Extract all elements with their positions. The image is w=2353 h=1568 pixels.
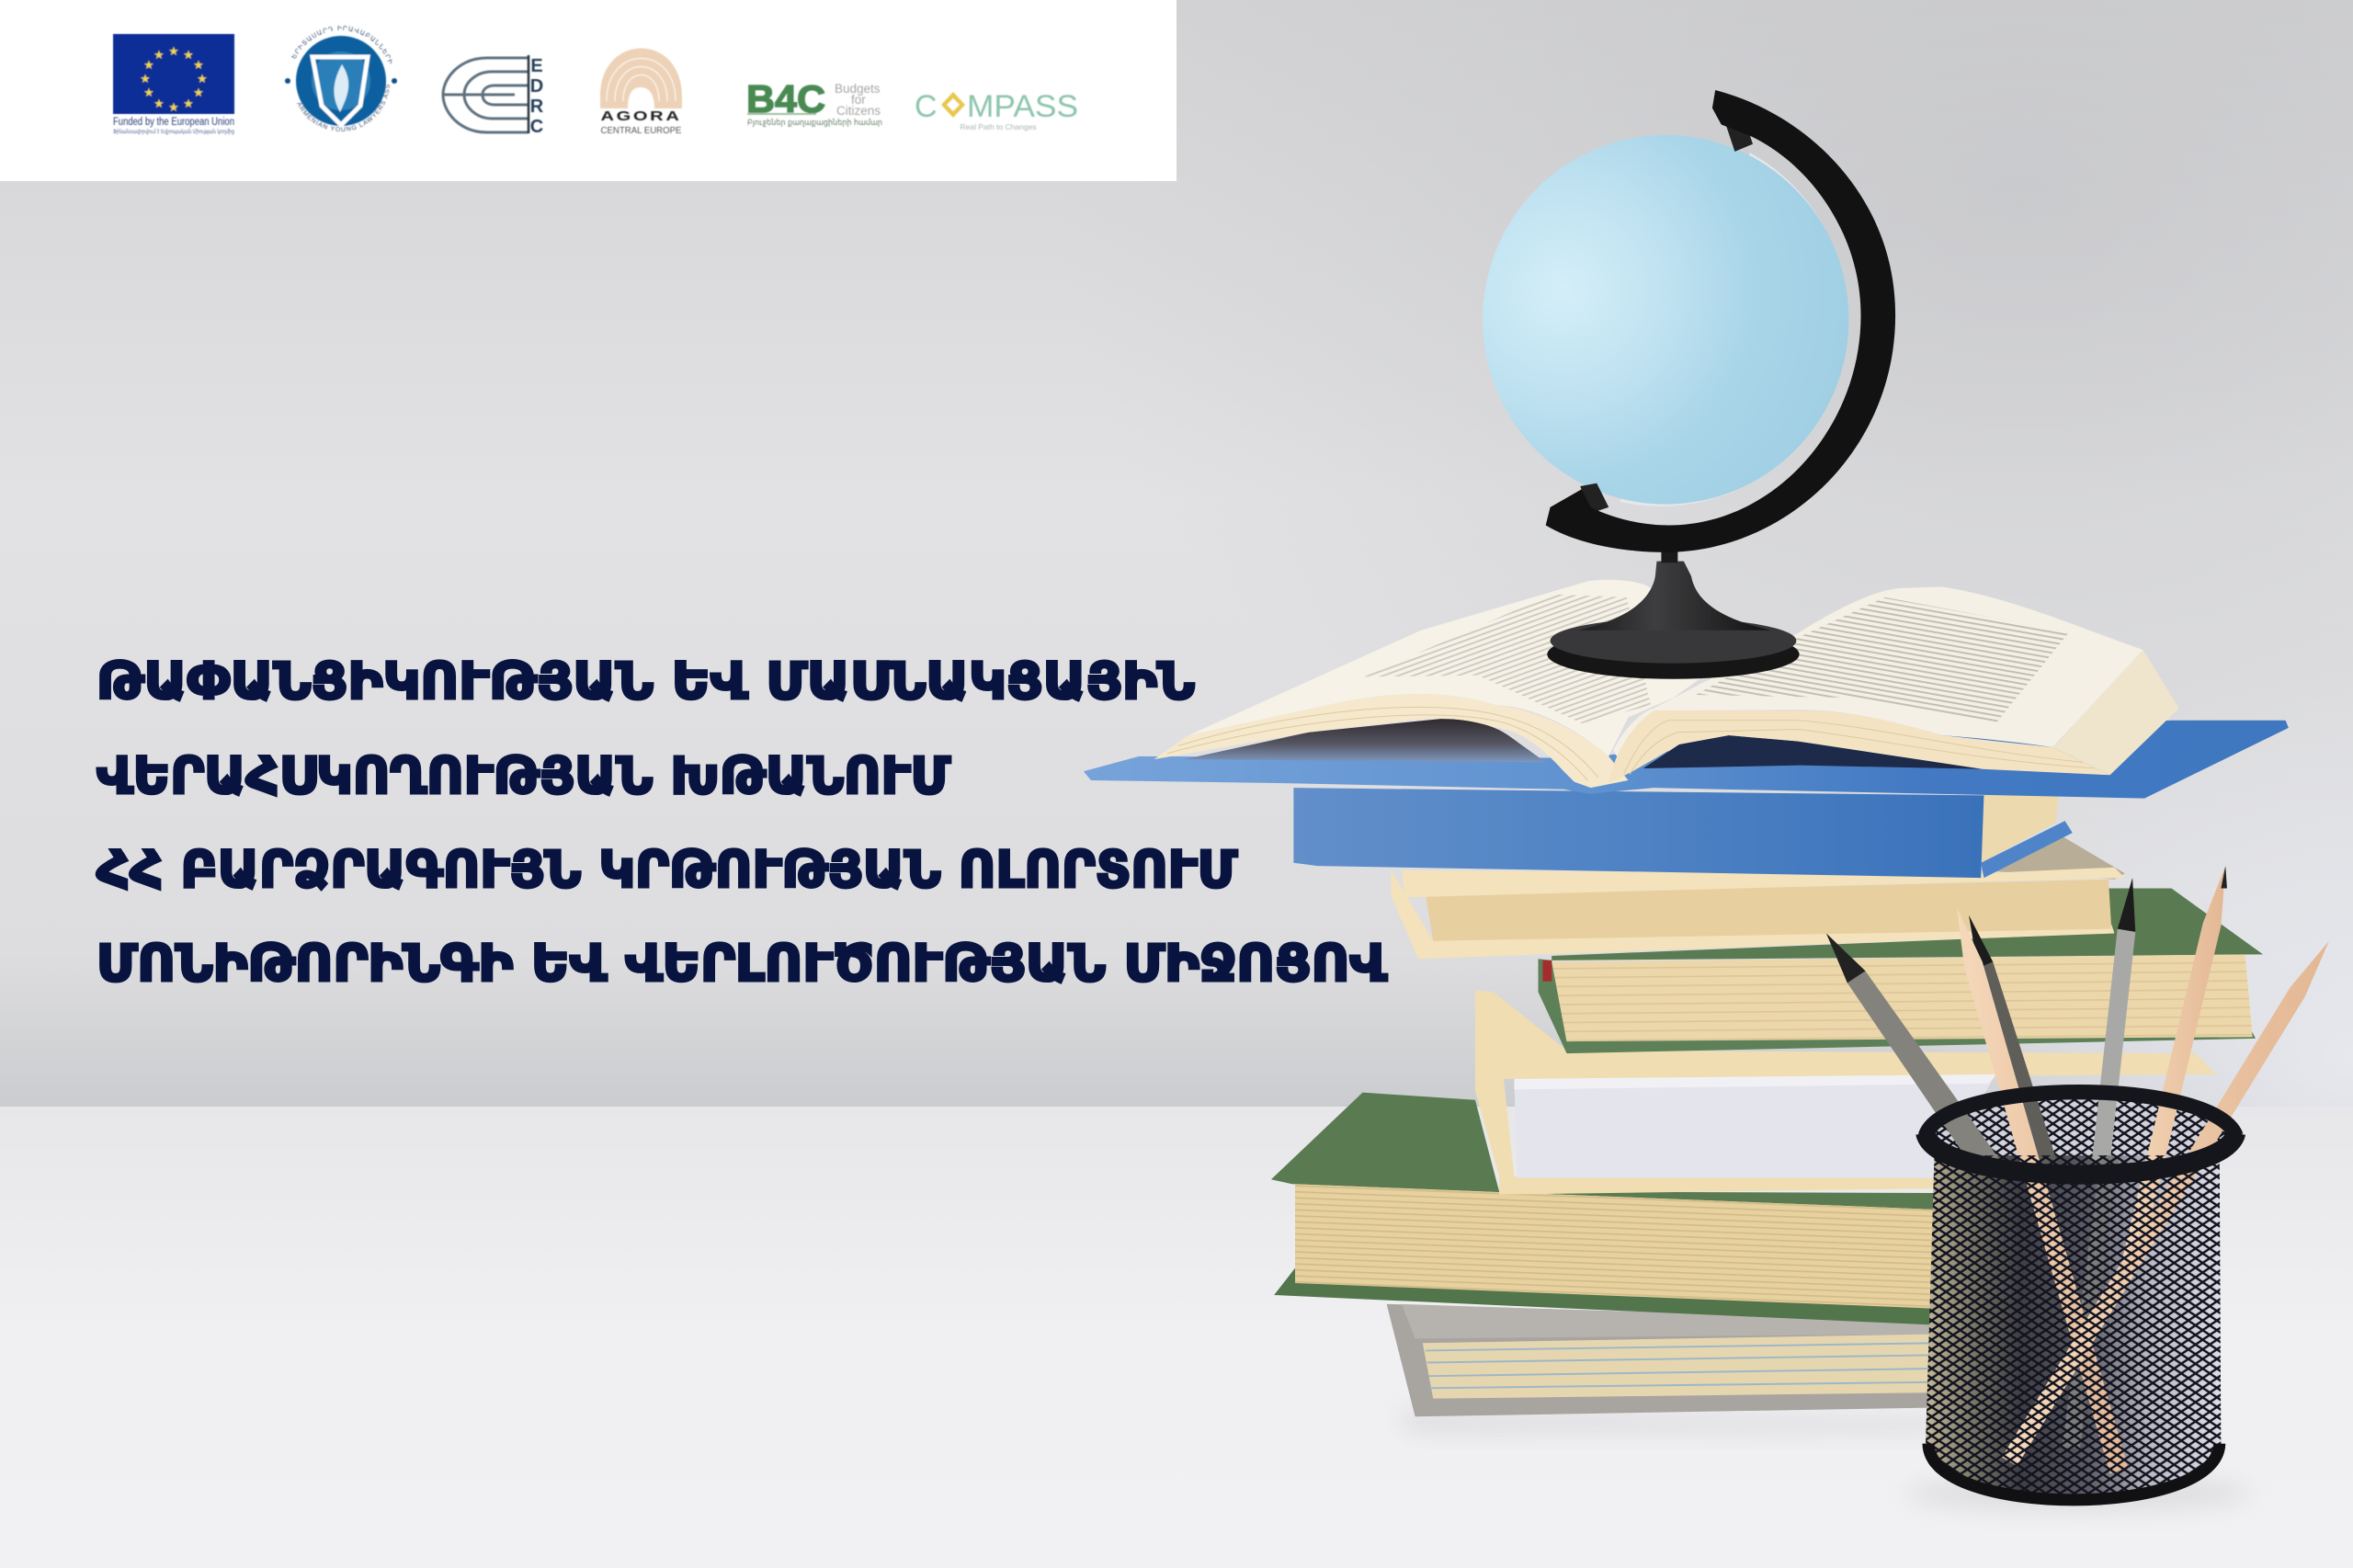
logo: EDRC: C	[530, 117, 543, 137]
logo: Compass	[915, 89, 1078, 131]
logo: Compass: MPASS	[967, 89, 1078, 124]
holder mesh	[1926, 1155, 2221, 1502]
logo: EU flag: ★	[183, 49, 194, 62]
book: green with cream pages	[1539, 889, 2263, 1053]
globe sphere	[1483, 135, 1848, 505]
logo: B4C: B4C	[746, 77, 825, 120]
holder interior	[1927, 1097, 2233, 1169]
logo: EU flag	[113, 34, 234, 135]
right fore-edge	[2053, 650, 2179, 775]
holder rim	[1926, 1092, 2236, 1175]
logo strip	[0, 0, 1176, 181]
open book	[1154, 580, 2179, 788]
photo: books, globe and pencil holder	[1084, 90, 2329, 1511]
logo: EU flag: ★	[193, 86, 204, 100]
globe pivots	[1726, 117, 1753, 152]
book: blue	[1293, 788, 2073, 878]
globe arm	[1546, 90, 1895, 552]
pencils	[1826, 866, 2329, 1473]
logo: EU flag: ★	[153, 97, 165, 111]
logo: EU flag: ★	[153, 49, 165, 62]
logo: B4C: Բյուջեներ քաղաքացիների համար	[747, 119, 882, 128]
title	[97, 652, 1388, 993]
right page text	[1696, 597, 2069, 723]
logo: EU flag: Funded by the European Union	[113, 117, 234, 128]
logo: EU flag: Ֆինանսավորվում է Եվրոպական Միության կողմից	[113, 128, 234, 135]
left page text	[1364, 595, 1651, 723]
gap under right pages	[1643, 735, 1983, 769]
title: ՄՈՆԻԹՈՐԻՆԳԻ ԵՎ ՎԵՐԼՈՒԾՈՒԹՅԱՆ ՄԻՋՈՑՈՎ	[97, 934, 1388, 993]
logo: Compass: C	[915, 89, 938, 124]
logo: B4C: for	[851, 93, 866, 107]
holder base ring	[1928, 1444, 2220, 1500]
gap under left pages	[1184, 719, 1546, 762]
logo: EU flag: ★	[143, 86, 154, 100]
logo: EU flag: ★	[168, 45, 179, 59]
book: large green	[1271, 1093, 1936, 1325]
holder see-through body	[1926, 1155, 2221, 1502]
logo: B4C: Citizens	[836, 104, 881, 118]
logo: EU flag: ★	[140, 73, 151, 86]
logo: EDRC: E	[530, 56, 543, 76]
logo: lawyers association: ԵՐԻՏԱՍԱՐԴ ԻՐԱՎԱԲԱՆՆԵՐԻ	[290, 25, 392, 64]
logo: EDRC	[442, 55, 544, 137]
right page surface	[1613, 586, 2143, 758]
logo: EU flag: ★	[183, 97, 194, 111]
left page surface	[1188, 580, 1726, 756]
logo: EU flag: ★	[197, 73, 208, 86]
left page block	[1154, 694, 1628, 788]
right page block	[1608, 710, 2110, 783]
book: white pages, cream cover	[1475, 991, 2216, 1195]
book: blue flat cover	[1084, 721, 2289, 799]
globe stand	[1547, 533, 1800, 679]
logo: EDRC: D	[530, 76, 543, 97]
logo: B4C	[746, 77, 882, 128]
logo: Agora Central Europe	[600, 48, 682, 136]
pencil holder	[1826, 866, 2329, 1502]
logo: Agora Central Europe: CENTRAL EUROPE	[601, 125, 682, 136]
book: grey bottom	[1387, 1304, 1936, 1416]
logo: Agora Central Europe: AGORA	[601, 108, 682, 124]
logo: lawyers association	[284, 25, 398, 132]
logo: B4C: Budgets	[835, 82, 881, 96]
book: cream cover	[1392, 835, 2125, 959]
logo: EU flag: ★	[193, 59, 204, 73]
logo: Compass: Real Path to Changes	[960, 122, 1037, 131]
light gap beside sphere	[1620, 156, 1844, 503]
title: ՎԵՐԱՀՍԿՈՂՈՒԹՅԱՆ ԽԹԱՆՈՒՄ	[97, 746, 950, 805]
logo: EDRC: R	[530, 97, 544, 117]
title: ԹԱՓԱՆՑԻԿՈՒԹՅԱՆ ԵՎ ՄԱՍՆԱԿՑԱՅԻՆ	[97, 652, 1195, 710]
title: ՀՀ ԲԱՐՁՐԱԳՈՒՅՆ ԿՐԹՈՒԹՅԱՆ ՈԼՈՐՏՈՒՄ	[97, 840, 1237, 899]
globe	[1483, 90, 1895, 679]
logo: EU flag: ★	[143, 59, 154, 73]
shadows	[1395, 1411, 2251, 1511]
logo: EU flag: ★	[168, 101, 179, 115]
